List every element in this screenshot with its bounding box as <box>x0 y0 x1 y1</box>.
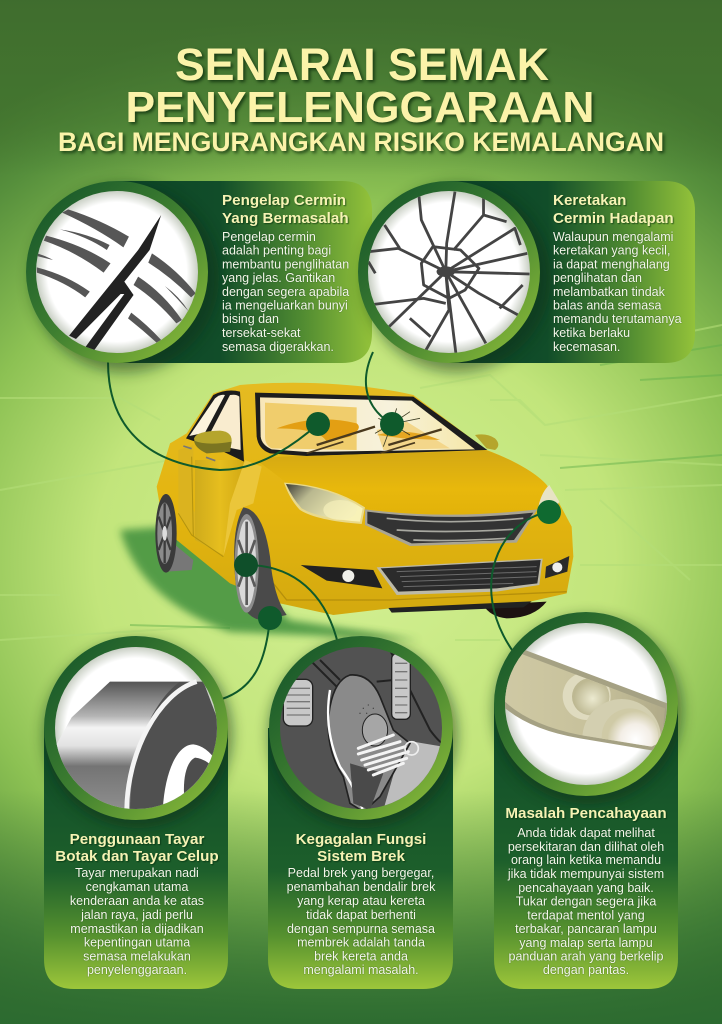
text block: penyelenggaraan. <box>87 963 187 977</box>
lower lip <box>273 583 567 618</box>
panel: lighting <box>494 612 682 989</box>
text block: Pedal brek yang bergegar, <box>288 866 434 880</box>
text block: panduan arah yang berkelip <box>509 950 664 964</box>
text block: membantu penglihatan <box>222 257 349 271</box>
mirrors <box>194 431 498 453</box>
text block: terbakar, pancaran lampu <box>515 922 657 936</box>
text block: yang malap serta lampu <box>519 936 653 950</box>
heading: Cermin Hadapan <box>553 210 674 227</box>
heading: Masalah Pencahayaan <box>505 805 667 822</box>
text block: dengan segera apabila <box>222 285 349 299</box>
text block: melambatkan tindak <box>553 285 666 299</box>
heading: Botak dan Tayar Celup <box>55 848 219 865</box>
text block: kecemasan. <box>553 340 620 354</box>
text block: yang jelas. Gantikan <box>222 271 335 285</box>
text block: ketika berlaku <box>553 326 630 340</box>
heading: Penggunaan Tayar <box>70 831 204 848</box>
marker: tyre <box>258 606 282 630</box>
text block: Walaupun mengalami <box>553 230 673 244</box>
text block: cengkaman utama <box>86 880 188 894</box>
text block: jika tidak mempunyai sistem <box>507 867 664 881</box>
text block: adalah penting bagi <box>222 244 331 258</box>
text block: persekitaran dan dilihat oleh <box>508 840 664 854</box>
text block: tidak dapat berhenti <box>306 908 416 922</box>
leader lines <box>108 352 549 699</box>
car body <box>157 383 573 615</box>
title <box>58 39 664 157</box>
left headlight <box>284 483 365 524</box>
heading: Kegagalan Fungsi <box>296 831 426 848</box>
marker: headlight <box>537 500 561 524</box>
icon: worn tyre <box>53 682 222 812</box>
text block: tersekat-sekat <box>222 326 301 340</box>
icon: wiper blade <box>37 209 196 350</box>
lower grille <box>377 559 543 595</box>
icon: headlamp <box>505 650 667 750</box>
text block: Anda tidak dapat melihat <box>517 826 655 840</box>
text block: brek kereta anda <box>314 950 408 964</box>
text block: mengalami masalah. <box>303 963 419 977</box>
text block: memandu terutamanya <box>553 312 682 326</box>
text block: yang kerap atau kereta <box>297 894 425 908</box>
panel: wiper <box>26 181 372 372</box>
heading: Pengelap Cermin <box>222 192 346 209</box>
icon: foot on brake pedal <box>283 650 443 812</box>
hood <box>258 451 547 515</box>
text block: Pengelap cermin <box>222 230 316 244</box>
text block: Tukar dengan segera jika <box>516 894 656 908</box>
title: PENYELENGGARAAN <box>126 83 594 132</box>
text block: dengan pantas. <box>543 963 629 977</box>
marker: wiper <box>306 412 330 436</box>
text block: membrek adalah tanda <box>297 936 425 950</box>
text block: balas anda semasa <box>553 298 661 312</box>
text block: ia dapat menghalang <box>553 257 670 271</box>
text block: semasa digerakkan. <box>222 340 334 354</box>
text block: pencahayaan yang baik. <box>518 881 654 895</box>
text block: dengan sempurna semasa <box>287 922 435 936</box>
panel: brake <box>268 636 457 989</box>
marker: windshield crack <box>380 412 404 436</box>
text block: ia mengeluarkan bunyi <box>222 298 348 312</box>
text block: Tayar merupakan nadi <box>75 866 199 880</box>
panel: tyres <box>44 636 232 989</box>
icon: cracked glass <box>368 192 530 353</box>
text block: memastikan ia dijadikan <box>70 922 204 936</box>
front wheel <box>234 507 287 620</box>
panel: windscreen crack <box>358 181 695 372</box>
car shadow on ground <box>120 525 420 640</box>
text block: bising dan <box>222 312 279 326</box>
text block: orang lain ketika memandu <box>511 853 661 867</box>
illustration: yellow car <box>155 383 573 620</box>
windshield <box>255 393 487 456</box>
text block: keretakan yang kecil, <box>553 244 670 258</box>
right headlight <box>538 485 559 510</box>
side door panels <box>178 445 262 557</box>
marker: brake <box>234 553 258 577</box>
upper grille <box>365 509 537 546</box>
title: SENARAI SEMAK <box>175 39 549 90</box>
text block: kenderaan anda ke atas <box>70 894 204 908</box>
heading: Keretakan <box>553 192 626 209</box>
text block: jalan raya, jadi perlu <box>80 908 193 922</box>
side window <box>186 391 244 462</box>
text block: semasa melakukan <box>83 950 191 964</box>
text block: kepentingan utama <box>84 936 190 950</box>
text block: terdapat mentol yang <box>527 908 645 922</box>
right fog lamp <box>545 556 569 578</box>
text block: penglihatan dan <box>553 271 642 285</box>
title: BAGI MENGURANGKAN RISIKO KEMALANGAN <box>58 127 664 157</box>
heading: Sistem Brek <box>317 848 405 865</box>
text block: penambahan bendalir brek <box>287 880 436 894</box>
rear wheel <box>155 494 193 573</box>
heading: Yang Bermasalah <box>222 210 349 227</box>
left fog lamp <box>301 565 382 588</box>
